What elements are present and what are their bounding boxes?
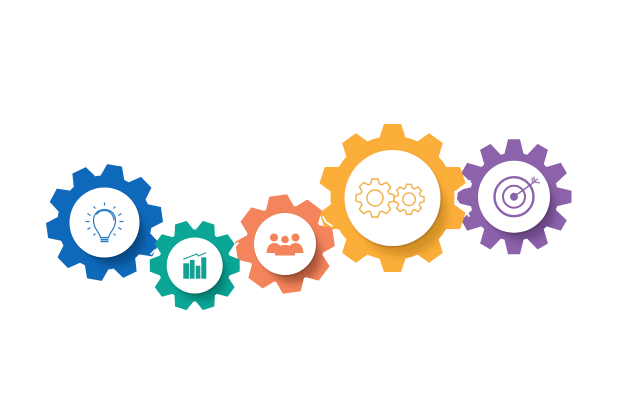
icon: lightbulb [86,202,124,242]
gear: blue lightbulb [44,162,164,282]
gear: yellow gears [316,122,468,274]
icon: two cogs [356,179,424,217]
gear: purple target [454,137,574,257]
icon: bar chart with trend arrow [183,253,206,279]
white gaps between meshing gears [151,181,470,256]
gear: teal chart [150,220,240,310]
gear: orange team [233,192,337,296]
icon: three people [266,234,304,256]
icon: target with arrow [494,177,540,216]
